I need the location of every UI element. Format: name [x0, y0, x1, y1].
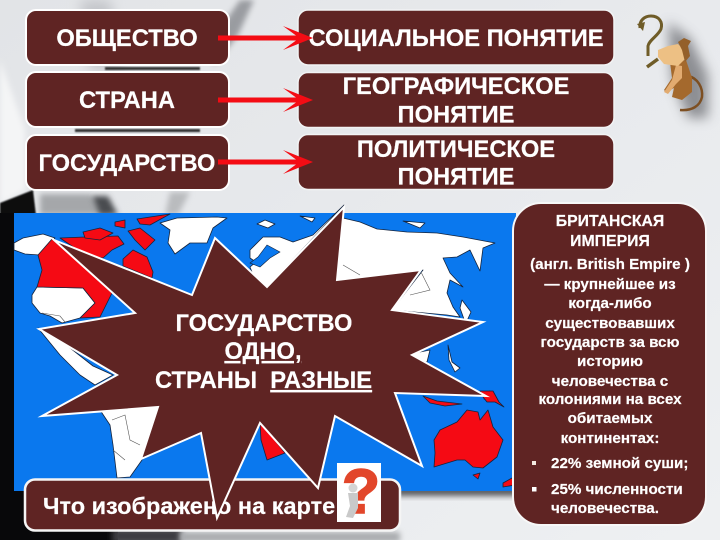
box: СТРАНА: [26, 72, 229, 127]
panel: British Empire: [513, 203, 706, 525]
panel description: — крупнейшее из: [544, 276, 676, 293]
callout text: [155, 311, 372, 394]
arrow: общество to социальное: [218, 26, 313, 50]
bullet list: 25% численности: [551, 481, 683, 498]
panel description: континентах:: [561, 430, 659, 447]
panel heading: ИМПЕРИЯ: [570, 233, 650, 250]
map land: red British territories: [37, 214, 515, 487]
bullet list: [532, 455, 688, 517]
icon: red question mark with figure: ?: [342, 457, 380, 527]
box: географическое понятие: ГЕОГРАФИЧЕСКОЕ: [343, 74, 569, 100]
arrow: страна to географическое: [218, 88, 313, 112]
box: политическое понятие: ПОЛИТИЧЕСКОЕ: [357, 137, 555, 163]
panel description: историю: [577, 353, 643, 370]
box: ГОСУДАРСТВО: [26, 135, 229, 190]
world map: [14, 205, 516, 491]
box: СТРАНА: СТРАНА: [79, 88, 175, 114]
box: ОБЩЕСТВО: ОБЩЕСТВО: [56, 26, 198, 52]
map: country borders: [42, 265, 430, 460]
box: ГОСУДАРСТВО: ГОСУДАРСТВО: [39, 151, 215, 177]
panel heading: [556, 213, 664, 250]
box: социальное понятие: [298, 10, 614, 65]
panel description: колониями на всех: [538, 391, 682, 408]
map land: white territories: [14, 205, 495, 478]
panel description: обитаемых: [568, 410, 653, 427]
bullet list: 22% земной суши;: [551, 455, 688, 472]
panel heading: БРИТАНСКАЯ: [556, 213, 664, 230]
question box: Что изображено на карте: [43, 493, 335, 519]
box: географическое понятие: [298, 72, 614, 128]
box: социальное понятие: СОЦИАЛЬНОЕ ПОНЯТИЕ: [308, 26, 604, 52]
arrow: государство to политическое: [218, 150, 313, 174]
panel description: существовавших: [545, 315, 675, 332]
map: Baltic sea: [250, 245, 280, 267]
callout text: СТРАНЫ РАЗНЫЕ: [155, 368, 372, 394]
box: ОБЩЕСТВО: [26, 10, 229, 65]
panel description: [530, 256, 690, 447]
box: политическое понятие: [298, 134, 614, 190]
box: географическое понятие: ПОНЯТИЕ: [398, 102, 514, 128]
callout text: ОДНО,: [224, 339, 302, 365]
panel description: государств за всю: [541, 334, 679, 351]
icon: monkey with question mark: [637, 16, 708, 118]
callout text: ГОСУДАРСТВО: [176, 311, 352, 337]
panel description: когда-либо: [568, 295, 652, 312]
box: политическое понятие: ПОНЯТИЕ: [398, 164, 514, 190]
bullet list: человечества.: [551, 500, 659, 517]
panel description: (англ. British Empire ): [530, 256, 690, 273]
starburst callout: [39, 207, 486, 518]
panel description: человечества с: [552, 373, 668, 390]
question box: [25, 480, 400, 530]
